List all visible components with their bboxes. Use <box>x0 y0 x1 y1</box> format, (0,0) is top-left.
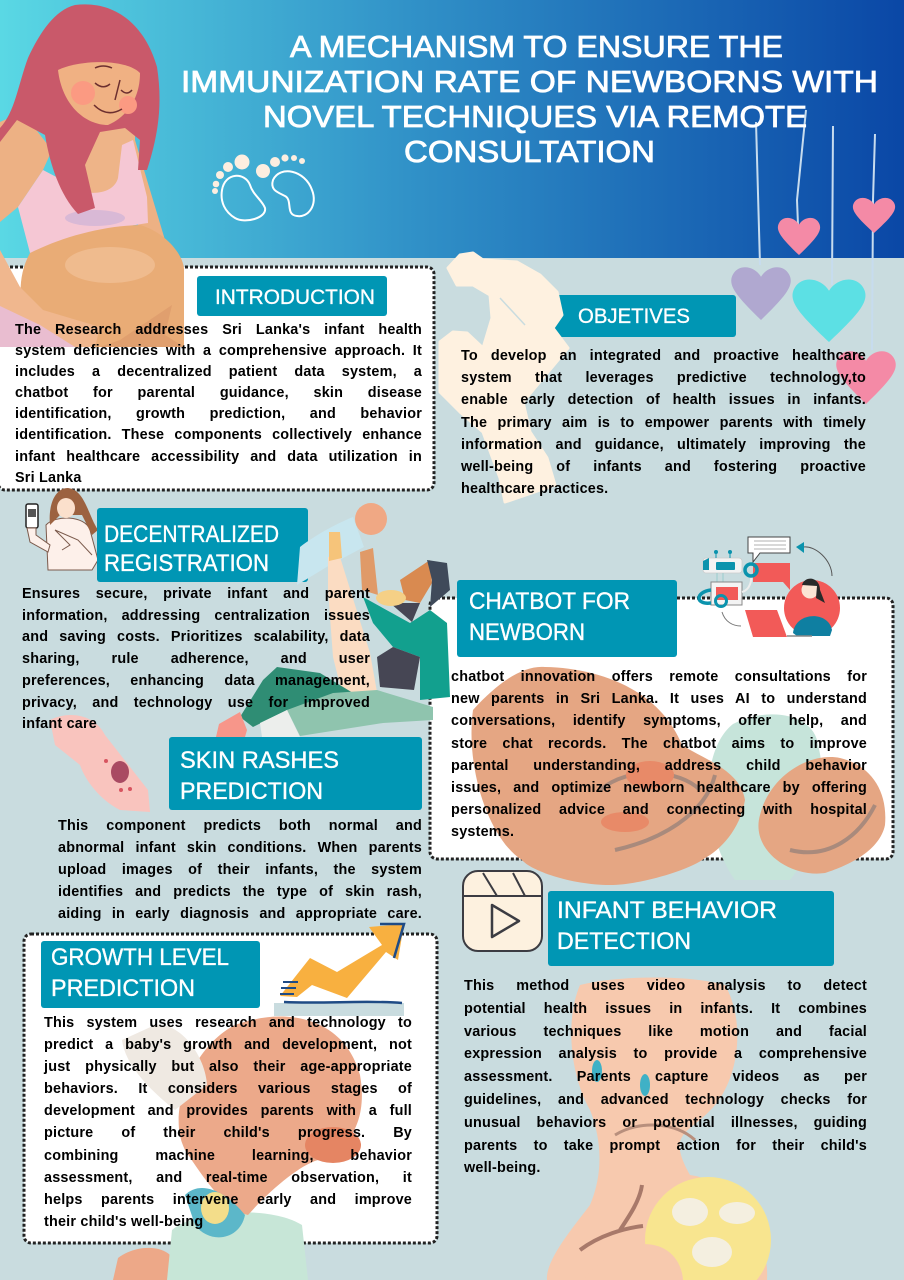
text: chatbot body: chatbot innovation offers remote consultations for <box>451 669 867 685</box>
heading label: growth level prediction <box>41 941 260 1008</box>
text: growth body: their child's well-being <box>44 1214 203 1230</box>
header band <box>0 0 904 258</box>
heading label: objectives <box>550 295 736 337</box>
text: chatbot body: personalized advice and connecting with hospital <box>451 802 867 818</box>
title: IMMUNIZATION RATE OF NEWBORNS WITH <box>181 64 878 99</box>
text: infant behavior body: various techniques like motion and facial <box>464 1024 867 1040</box>
text: introduction body: The Research addresses Sri Lanka's infant health <box>15 322 422 338</box>
heading label: skin rashes prediction: PREDICTION <box>180 778 323 805</box>
text: growth body: behaviors. It considers various stages of <box>44 1081 412 1097</box>
illustration: hand with rash <box>50 715 150 812</box>
heading label: chatbot for newborn <box>457 580 677 657</box>
text: growth body <box>44 1015 412 1230</box>
text: decentralized registration body: sharing, rule adherence, and user <box>22 651 370 667</box>
text: objectives body: The primary aim is to empower parents with timely <box>461 415 866 431</box>
heading label: skin rashes prediction: SKIN RASHES <box>180 747 339 774</box>
heading label: growth level prediction: PREDICTION <box>51 975 195 1002</box>
heading label: chatbot for newborn: NEWBORN <box>469 619 585 646</box>
text: infant behavior body: parents to take prompt action for their child's <box>464 1138 867 1154</box>
illustration: woman holding phone <box>26 488 98 570</box>
illustration: baby at bottom right <box>547 978 771 1280</box>
icon: baby footprints <box>212 154 314 220</box>
text: chatbot body: new parents in Sri Lanka. It uses AI to understand <box>451 691 867 707</box>
illustration: baby inside growth panel <box>113 1017 362 1280</box>
text: decentralized registration body: and saving costs. Prioritizes scalability, data <box>22 629 370 645</box>
panel: introduction <box>0 267 434 490</box>
text: growth body: assessment, and real-time observation, it <box>44 1170 412 1186</box>
text: skin rashes body: abnormal infant skin conditions. When parents <box>58 840 422 856</box>
text: decentralized registration body: preferences, enhancing data management, <box>22 673 370 689</box>
text: introduction body: chatbot for parental guidance, skin disease <box>15 385 422 401</box>
illustration: cream parent and child silhouette <box>440 253 568 502</box>
text: growth body: predict a baby's growth and development, not <box>44 1037 412 1053</box>
text: chatbot body: systems. <box>451 824 514 840</box>
title: NOVEL TECHNIQUES VIA REMOTE <box>263 99 807 134</box>
text: growth body: This system uses research and technology to <box>44 1015 412 1031</box>
text: decentralized registration body: Ensures secure, private infant and parent <box>22 586 370 602</box>
icon: rising growth arrow <box>274 924 404 1016</box>
text: growth body: just physically but also their age-appropriate <box>44 1059 412 1075</box>
title <box>181 29 878 169</box>
text: introduction body: identification. These components collectively enhance <box>15 427 422 443</box>
text: objectives body: system that leverages predictive technology,to <box>461 370 866 386</box>
text: chatbot body: store chat records. The chatbot aims to improve <box>451 736 867 752</box>
heading label: skin rashes prediction <box>169 737 422 810</box>
heading label: infant behavior detection: INFANT BEHAVIOR <box>557 897 777 924</box>
icon: hanging hearts <box>731 110 896 404</box>
text: introduction body: Sri Lanka <box>15 470 82 486</box>
text: chatbot body: conversations, identify symptoms, offer help, and <box>451 713 867 729</box>
text: skin rashes body <box>58 818 422 922</box>
text: infant behavior body: guidelines, and advanced technology checks for <box>464 1092 867 1108</box>
text: infant behavior body <box>464 978 867 1176</box>
heading label: decentralized registration: REGISTRATION <box>104 550 269 577</box>
text: introduction body: includes a decentralized patient data system, a <box>15 364 422 380</box>
text: chatbot body <box>451 669 867 840</box>
text: objectives body <box>461 348 866 497</box>
text: growth body: picture of their child's progress. By <box>44 1125 412 1141</box>
title: A MECHANISM TO ENSURE THE <box>290 29 783 64</box>
text: objectives body: information and guidance, ultimately improving the <box>461 437 866 453</box>
text: infant behavior body: potential health issues in infants. It combines <box>464 1001 867 1017</box>
heading label: introduction <box>197 276 387 316</box>
text: decentralized registration body <box>22 586 370 732</box>
text: decentralized registration body: privacy, and technology use for improved <box>22 695 370 711</box>
text: infant behavior body: assessment. Parents capture videos as per <box>464 1069 867 1085</box>
text: infant behavior body: expression analysis to provide a comprehensive <box>464 1046 867 1062</box>
text: skin rashes body: upload images of their infants, the system <box>58 862 422 878</box>
text: introduction body: identification, growth prediction, and behavior <box>15 406 422 422</box>
text: decentralized registration body: infant care <box>22 716 97 732</box>
heading label: growth level prediction: GROWTH LEVEL <box>51 944 229 971</box>
heading label: infant behavior detection <box>548 891 834 966</box>
title: CONSULTATION <box>404 134 655 169</box>
icon: video clapper with play <box>463 871 542 951</box>
text: chatbot body: parental understanding, address child behavior <box>451 758 867 774</box>
text: introduction body: infant healthcare accessibility and data utilization in <box>15 449 422 465</box>
text: introduction body: system deficiencies with a comprehensive approach. It <box>15 343 422 359</box>
illustration: pregnant mother <box>0 4 184 347</box>
text: growth body: development and provides parents with a full <box>44 1103 412 1119</box>
text: infant behavior body: well-being. <box>464 1160 541 1176</box>
text: chatbot body: issues, and optimize newborn healthcare by offering <box>451 780 867 796</box>
text: objectives body: well-being of infants and fostering proactive <box>461 459 866 475</box>
text: infant behavior body: unusual behaviors or potential illnesses, guiding <box>464 1115 867 1131</box>
icon: chatbot with woman at laptop <box>699 537 840 637</box>
heading label: infant behavior detection: DETECTION <box>557 928 691 955</box>
text: objectives body: healthcare practices. <box>461 481 608 497</box>
panel: chatbot <box>430 598 893 859</box>
text: skin rashes body: This component predicts both normal and <box>58 818 422 834</box>
text: introduction body <box>15 322 422 486</box>
text: infant behavior body: This method uses video analysis to detect <box>464 978 867 994</box>
illustration: sleeping baby inside chatbot panel <box>471 667 885 885</box>
heading label: decentralized registration <box>97 508 308 582</box>
heading label: decentralized registration: DECENTRALIZED <box>104 521 279 548</box>
text: skin rashes body: aiding in early diagnosis and appropriate care. <box>58 906 422 922</box>
text: skin rashes body: identifies and predicts the type of skin rash, <box>58 884 422 900</box>
text: decentralized registration body: information, addressing centralization issues <box>22 608 370 624</box>
text: growth body: combining machine learning, behavior <box>44 1148 412 1164</box>
heading label: chatbot for newborn: CHATBOT FOR <box>469 588 630 615</box>
illustration: mother lifting baby <box>216 503 450 737</box>
text: objectives body: enable early detection of health issues in infants. <box>461 392 866 408</box>
heading label: introduction: INTRODUCTION <box>215 286 375 309</box>
text: growth body: helps parents intervene early and improve <box>44 1192 412 1208</box>
text: objectives body: To develop an integrated and proactive healthcare <box>461 348 866 364</box>
heading label: objectives: OBJETIVES <box>578 305 690 328</box>
panel: growth <box>24 934 437 1243</box>
